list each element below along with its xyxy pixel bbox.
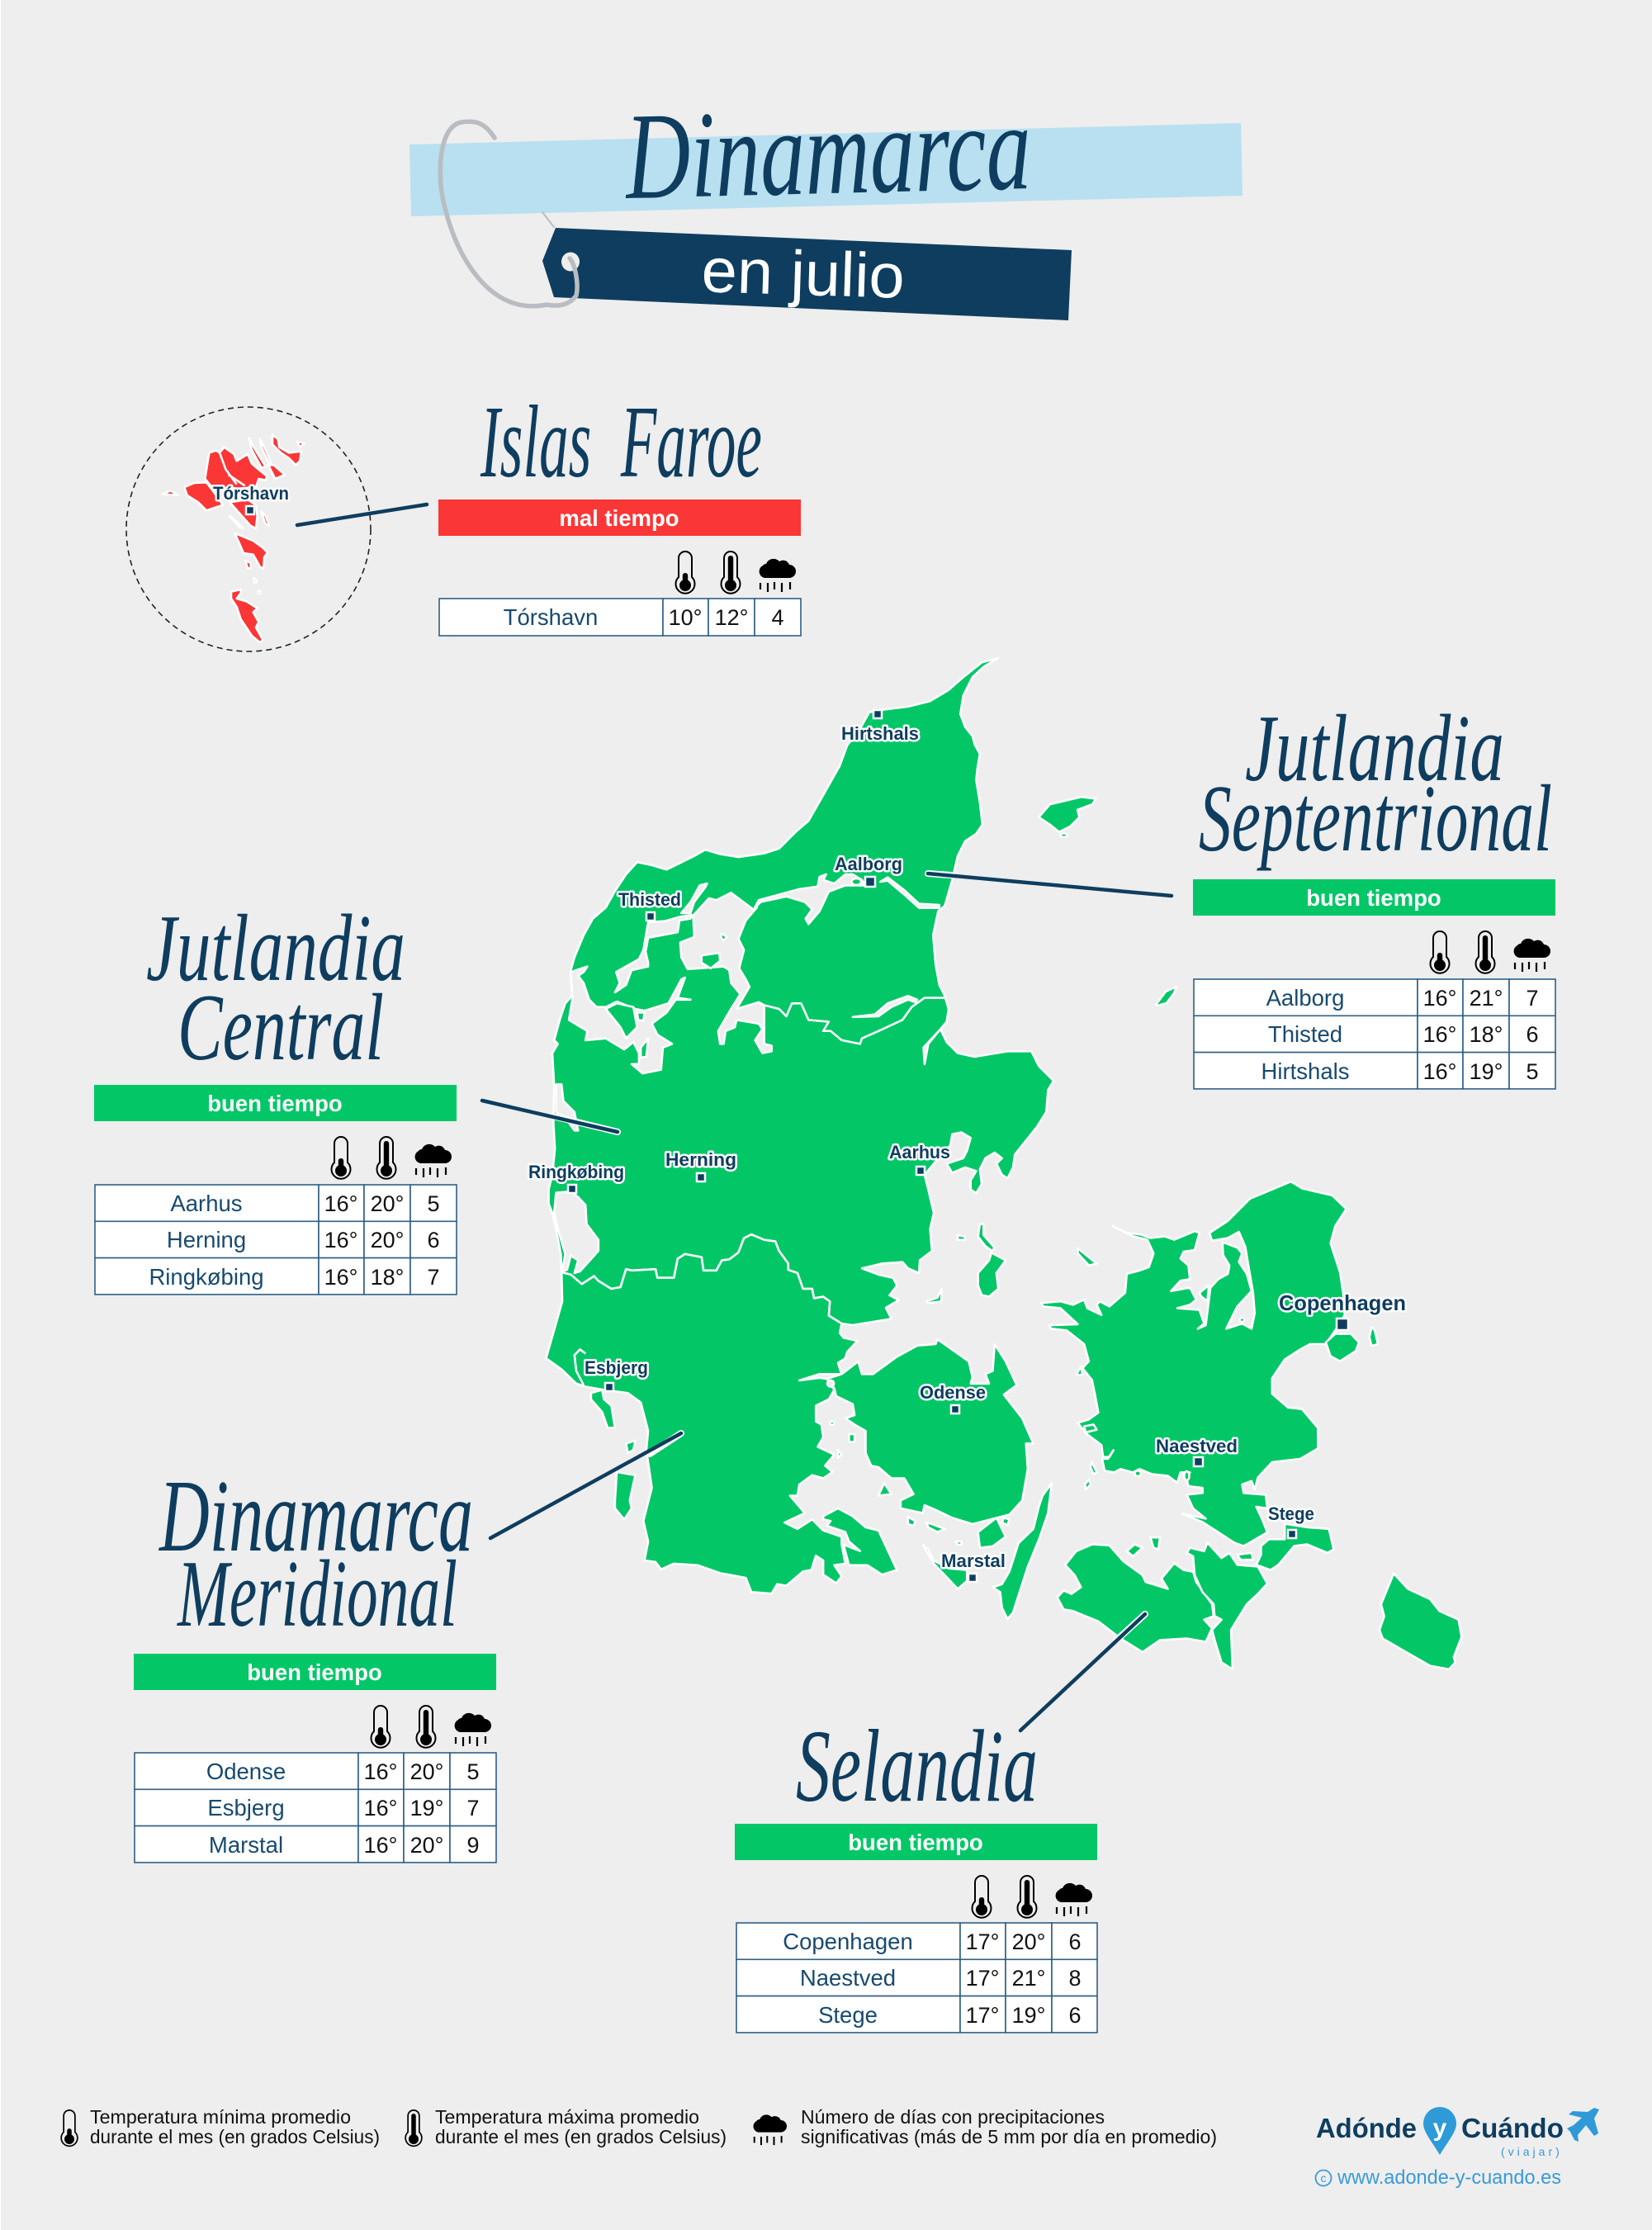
icon: maximum temperature bbox=[722, 552, 740, 594]
city: Ringkobing bbox=[528, 1162, 624, 1193]
regional border: north and central Jutland bbox=[764, 998, 944, 1044]
icon: minimum temperature bbox=[372, 1706, 390, 1748]
title banner: light blue band bbox=[409, 123, 1243, 216]
ring fjord bbox=[554, 1191, 599, 1273]
heading: Jutlandia Central bbox=[146, 896, 405, 1080]
city: Herning: Herning bbox=[665, 1149, 736, 1170]
heading: Selandia: Selandia bbox=[796, 1710, 1038, 1824]
connector: Jutlandia Central bbox=[482, 1101, 618, 1132]
icon: rain days bbox=[455, 1713, 491, 1746]
table: Central cities: 16° bbox=[324, 1191, 357, 1216]
map: Faroe inset bbox=[126, 407, 371, 651]
legend text: minimum temperature: durante el mes (en grados Celsius) bbox=[90, 2126, 380, 2147]
city: Odense: Odense bbox=[920, 1382, 986, 1403]
Lolland bbox=[1058, 1545, 1214, 1652]
table: Selandia cities: 6 bbox=[1068, 2003, 1082, 2028]
table: Meridional cities: 16° bbox=[364, 1759, 397, 1784]
table: Septentrional cities: 7 bbox=[1526, 986, 1539, 1011]
legend text: maximum temperature: Temperatura máxima promedio bbox=[435, 2106, 699, 2128]
city: Hirtshals: Hirtshals bbox=[841, 723, 919, 744]
legend text: rain days: significativas (más de 5 mm por día en promedio) bbox=[801, 2126, 1217, 2147]
city: Aalborg: Aalborg bbox=[835, 854, 902, 874]
Faroe northern islands bbox=[163, 435, 304, 528]
logo bbox=[1316, 2107, 1599, 2189]
table: Central cities: 16° bbox=[324, 1265, 357, 1290]
table: Selandia cities bbox=[736, 1923, 1097, 2033]
city: Stege bbox=[1268, 1503, 1314, 1538]
logo text: Cuando: Cuándo bbox=[1461, 2113, 1564, 2143]
table: Meridional cities: Esbjerg bbox=[207, 1795, 285, 1820]
table: Torshavn: 10° bbox=[669, 605, 702, 630]
Bornholm bbox=[1380, 1574, 1461, 1669]
table: Septentrional cities: Aalborg bbox=[1266, 985, 1344, 1011]
city: Copenhagen: Copenhagen bbox=[1279, 1290, 1406, 1315]
city: Odense bbox=[920, 1382, 986, 1413]
table: Meridional cities: 19° bbox=[410, 1796, 443, 1820]
Als bbox=[823, 1508, 897, 1574]
table: Septentrional cities: 16° bbox=[1423, 1022, 1456, 1047]
table: Selandia cities: 6 bbox=[1068, 1929, 1082, 1954]
table: Selandia cities: 17° bbox=[966, 1966, 999, 1991]
panel: Dinamarca Meridional weather bbox=[134, 1654, 496, 1863]
icon: legend maximum temperature bbox=[405, 2110, 422, 2146]
title: Dinamarca bbox=[622, 78, 1033, 225]
Aero bbox=[923, 1545, 967, 1588]
logo pin bbox=[1423, 2107, 1456, 2155]
connector: Dinamarca Meridional bbox=[490, 1433, 681, 1538]
panel: Selandia weather bbox=[735, 1824, 1097, 2033]
panel: Jutlandia Septentrional weather bbox=[1193, 879, 1555, 1089]
table: Central cities: 7 bbox=[427, 1265, 440, 1290]
table: Meridional cities: 20° bbox=[410, 1759, 443, 1784]
table: Selandia cities: 17° bbox=[966, 1929, 999, 1954]
icon: minimum temperature bbox=[973, 1876, 991, 1918]
table: Septentrional cities: Hirtshals bbox=[1261, 1058, 1349, 1084]
table: Central cities bbox=[95, 1185, 457, 1295]
table: Septentrional cities: 5 bbox=[1526, 1059, 1539, 1084]
panel: Jutlandia Central weather bbox=[94, 1085, 457, 1295]
city: Esbjerg: Esbjerg bbox=[585, 1357, 648, 1378]
table: Meridional cities bbox=[135, 1753, 496, 1863]
city: Aarhus: Aarhus bbox=[889, 1142, 950, 1162]
icon: rain days bbox=[415, 1144, 452, 1177]
table: Meridional cities: Marstal bbox=[209, 1832, 283, 1858]
icon: minimum temperature bbox=[1430, 931, 1450, 973]
city: Thisted: Thisted bbox=[618, 889, 681, 910]
table: Septentrional cities bbox=[1194, 979, 1555, 1089]
panel: Jutlandia Septentrional weather: buen tiempo bbox=[1306, 885, 1441, 911]
heading: Dinamarca Meridional: Dinamarca bbox=[159, 1460, 473, 1574]
map: Zealand and eastern islands bbox=[1041, 1181, 1461, 1669]
heading: Jutlandia Septentrional bbox=[1199, 696, 1552, 871]
website: www.adonde-y-cuando.es bbox=[1337, 2166, 1561, 2189]
table: Central cities: 20° bbox=[371, 1191, 404, 1216]
city: Hirtshals bbox=[841, 710, 919, 744]
city: Naestved bbox=[1156, 1436, 1238, 1466]
table: Central cities: Ringkøbing bbox=[149, 1264, 264, 1290]
table: Septentrional cities: 18° bbox=[1470, 1022, 1503, 1047]
connector: Jutlandia Septentrional bbox=[928, 874, 1172, 896]
table: Selandia cities: Stege bbox=[818, 2002, 878, 2028]
heading: Dinamarca Meridional: Meridional bbox=[177, 1541, 457, 1646]
legend bbox=[61, 2106, 1217, 2147]
panel: Dinamarca Meridional weather: buen tiempo bbox=[247, 1659, 382, 1685]
legend text: maximum temperature bbox=[435, 2106, 727, 2147]
city: Aalborg bbox=[835, 854, 902, 887]
table: Central cities: 5 bbox=[427, 1191, 440, 1216]
water: Limfjord and fjords bbox=[556, 874, 940, 1130]
icon: legend rain days bbox=[753, 2114, 787, 2145]
subtitle tag: en julio bbox=[701, 235, 906, 312]
table: Central cities: 16° bbox=[324, 1228, 357, 1252]
table: Septentrional cities: Thisted bbox=[1268, 1021, 1342, 1047]
connector: Selandia bbox=[1020, 1614, 1145, 1730]
table: Central cities: Herning bbox=[167, 1227, 246, 1252]
table: Central cities: 18° bbox=[371, 1265, 404, 1290]
table: Selandia cities: 19° bbox=[1012, 2003, 1045, 2028]
table: Meridional cities: Odense bbox=[206, 1759, 286, 1784]
table: Selandia cities: 8 bbox=[1068, 1966, 1082, 1991]
table: Meridional cities: 7 bbox=[466, 1796, 480, 1820]
icon: plane bbox=[1567, 2108, 1599, 2142]
table: Torshavn: 4 bbox=[771, 605, 784, 630]
legend text: maximum temperature: durante el mes (en grados Celsius) bbox=[435, 2126, 727, 2147]
Amager and Saltholm bbox=[1326, 1334, 1359, 1361]
table: Torshavn bbox=[439, 599, 801, 636]
icon: legend minimum temperature bbox=[61, 2110, 78, 2146]
table: Selandia cities: 17° bbox=[966, 2003, 999, 2028]
city: Ringkobing: Ringkøbing bbox=[528, 1162, 624, 1182]
icon: maximum temperature bbox=[1476, 931, 1494, 973]
table: Selandia cities: Naestved bbox=[800, 1965, 896, 1991]
table: Central cities: 6 bbox=[427, 1228, 440, 1252]
heading: Jutlandia Central: Jutlandia bbox=[146, 896, 405, 1001]
heading: Jutlandia Septentrional: Jutlandia bbox=[1245, 696, 1504, 801]
map: Anholt island bbox=[1156, 987, 1176, 1006]
table: Torshavn: 12° bbox=[715, 605, 748, 630]
city: Copenhagen bbox=[1279, 1290, 1406, 1330]
subtitle tag bbox=[542, 228, 1072, 320]
table: Meridional cities: 16° bbox=[364, 1796, 397, 1820]
table: Septentrional cities: 19° bbox=[1470, 1059, 1503, 1084]
website: c bbox=[1321, 2171, 1326, 2185]
table: Meridional cities: 20° bbox=[410, 1833, 443, 1858]
panel: Jutlandia Central weather: buen tiempo bbox=[207, 1091, 343, 1116]
panel: Selandia weather: buen tiempo bbox=[848, 1830, 983, 1855]
Samso, Tuno, Endelave bbox=[978, 1224, 1006, 1297]
icon: rain days bbox=[760, 559, 796, 592]
table: Torshavn: Tórshavn bbox=[504, 604, 598, 630]
table: Septentrional cities: 6 bbox=[1526, 1022, 1539, 1047]
legend text: minimum temperature: Temperatura mínima promedio bbox=[90, 2106, 351, 2128]
table: Septentrional cities: 16° bbox=[1423, 986, 1456, 1011]
heading: Dinamarca Meridional bbox=[159, 1460, 473, 1646]
Fano, Mando, Romo bbox=[591, 1390, 615, 1427]
Mon bbox=[1257, 1524, 1333, 1570]
icon: rain days bbox=[1514, 939, 1550, 972]
table: Selandia cities: 20° bbox=[1012, 1929, 1045, 1954]
table: Meridional cities: 5 bbox=[466, 1759, 480, 1784]
legend text: rain days: Número de días con precipitaciones bbox=[801, 2106, 1105, 2128]
heading: Jutlandia Central: Central bbox=[178, 975, 384, 1080]
icon: maximum temperature bbox=[376, 1137, 396, 1179]
legend text: minimum temperature bbox=[90, 2106, 380, 2147]
city: Marstal bbox=[941, 1551, 1006, 1582]
icon: rain days bbox=[1056, 1883, 1092, 1916]
heading: Islas Faroe: Islas Faroe bbox=[480, 386, 762, 500]
icon: maximum temperature bbox=[1017, 1876, 1037, 1918]
city: Aarhus bbox=[889, 1142, 950, 1175]
connector: Islas Faroe bbox=[297, 504, 427, 525]
table: Central cities: Aarhus bbox=[170, 1191, 243, 1216]
table: Septentrional cities: 16° bbox=[1423, 1059, 1456, 1084]
table: Septentrional cities: 21° bbox=[1470, 986, 1503, 1011]
table: Selandia cities: Copenhagen bbox=[783, 1929, 913, 1954]
icon: minimum temperature bbox=[675, 552, 695, 594]
map: Faroe inset: Tórshavn bbox=[213, 483, 289, 504]
logo pin: y bbox=[1433, 2114, 1447, 2142]
table: Meridional cities: 9 bbox=[466, 1833, 480, 1858]
logo text: viajar: (viajar) bbox=[1501, 2145, 1563, 2158]
Faroe southern islands bbox=[231, 533, 267, 642]
islands in Limfjord and Kattegat bbox=[721, 933, 727, 940]
map: south Jutland, Funen and islands bbox=[546, 1191, 1052, 1619]
city: Stege: Stege bbox=[1268, 1503, 1314, 1524]
Funen bbox=[827, 1339, 1034, 1524]
tag string loop bbox=[440, 121, 577, 306]
panel: Islas Faroe weather bbox=[438, 500, 801, 636]
Falster bbox=[1186, 1542, 1267, 1669]
legend text: rain days bbox=[801, 2106, 1217, 2147]
table: Selandia cities: 21° bbox=[1012, 1966, 1045, 1991]
icon: maximum temperature bbox=[416, 1706, 436, 1748]
table: Central cities: 20° bbox=[371, 1228, 404, 1252]
city: Thisted bbox=[618, 889, 681, 921]
city: Naestved: Naestved bbox=[1156, 1436, 1238, 1456]
logo text: Adonde: Adónde bbox=[1316, 2113, 1417, 2143]
city: Herning bbox=[665, 1149, 736, 1181]
map: Jutland north and central bbox=[549, 658, 1096, 1325]
table: Meridional cities: 16° bbox=[364, 1833, 397, 1858]
panel: Islas Faroe weather: mal tiempo bbox=[559, 505, 679, 531]
icon: minimum temperature bbox=[332, 1137, 350, 1179]
city: Esbjerg bbox=[585, 1357, 648, 1391]
city: Marstal: Marstal bbox=[941, 1551, 1006, 1571]
Langeland bbox=[993, 1483, 1052, 1619]
